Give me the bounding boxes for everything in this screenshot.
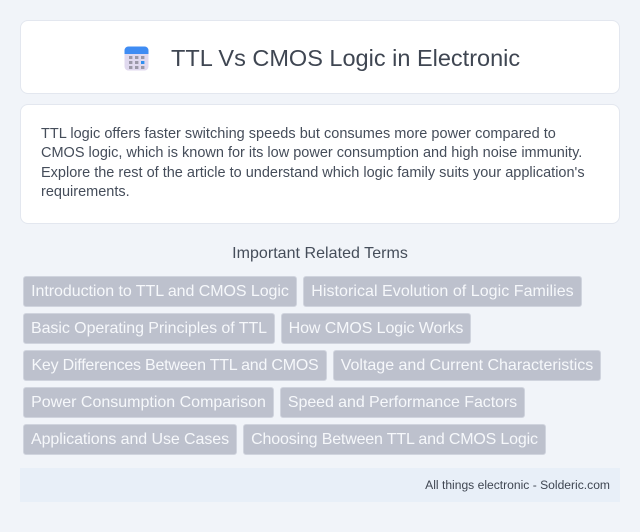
tag: Speed and Performance Factors xyxy=(288,394,517,411)
tag: Key Differences Between TTL and CMOS xyxy=(31,357,319,374)
section heading: Important Related Terms xyxy=(232,245,408,262)
summary text: requirements. xyxy=(41,184,130,200)
title: TTL Vs CMOS Logic in Electronic xyxy=(171,45,520,71)
footer text: All things electronic - Solderic.com xyxy=(425,478,610,492)
icon: calendar xyxy=(124,46,148,70)
summary text: CMOS logic, which is known for its low power consumption and high noise immunity. xyxy=(41,145,582,161)
summary text xyxy=(41,126,585,200)
tag xyxy=(23,350,327,381)
related terms tags xyxy=(23,276,601,455)
tag: Voltage and Current Characteristics xyxy=(341,357,593,374)
tag xyxy=(23,313,275,344)
tag xyxy=(333,350,601,381)
tag: Applications and Use Cases xyxy=(31,431,229,448)
tag: Introduction to TTL and CMOS Logic xyxy=(31,283,289,300)
footer bar xyxy=(20,468,620,502)
tag xyxy=(23,424,237,455)
tag xyxy=(303,276,582,307)
summary card xyxy=(20,104,620,224)
tag xyxy=(243,424,546,455)
summary text: Explore the rest of the article to understand which logic family suits your application's xyxy=(41,165,585,181)
tag xyxy=(23,276,297,307)
tag: How CMOS Logic Works xyxy=(289,320,463,337)
tag xyxy=(23,387,274,418)
tag xyxy=(280,387,525,418)
header card xyxy=(20,20,620,94)
tag: Choosing Between TTL and CMOS Logic xyxy=(251,431,538,448)
tag xyxy=(281,313,471,344)
tag: Basic Operating Principles of TTL xyxy=(31,320,267,337)
tag: Historical Evolution of Logic Families xyxy=(311,283,574,300)
tag: Power Consumption Comparison xyxy=(31,394,266,411)
summary text: TTL logic offers faster switching speeds but consumes more power compared to xyxy=(41,126,556,142)
